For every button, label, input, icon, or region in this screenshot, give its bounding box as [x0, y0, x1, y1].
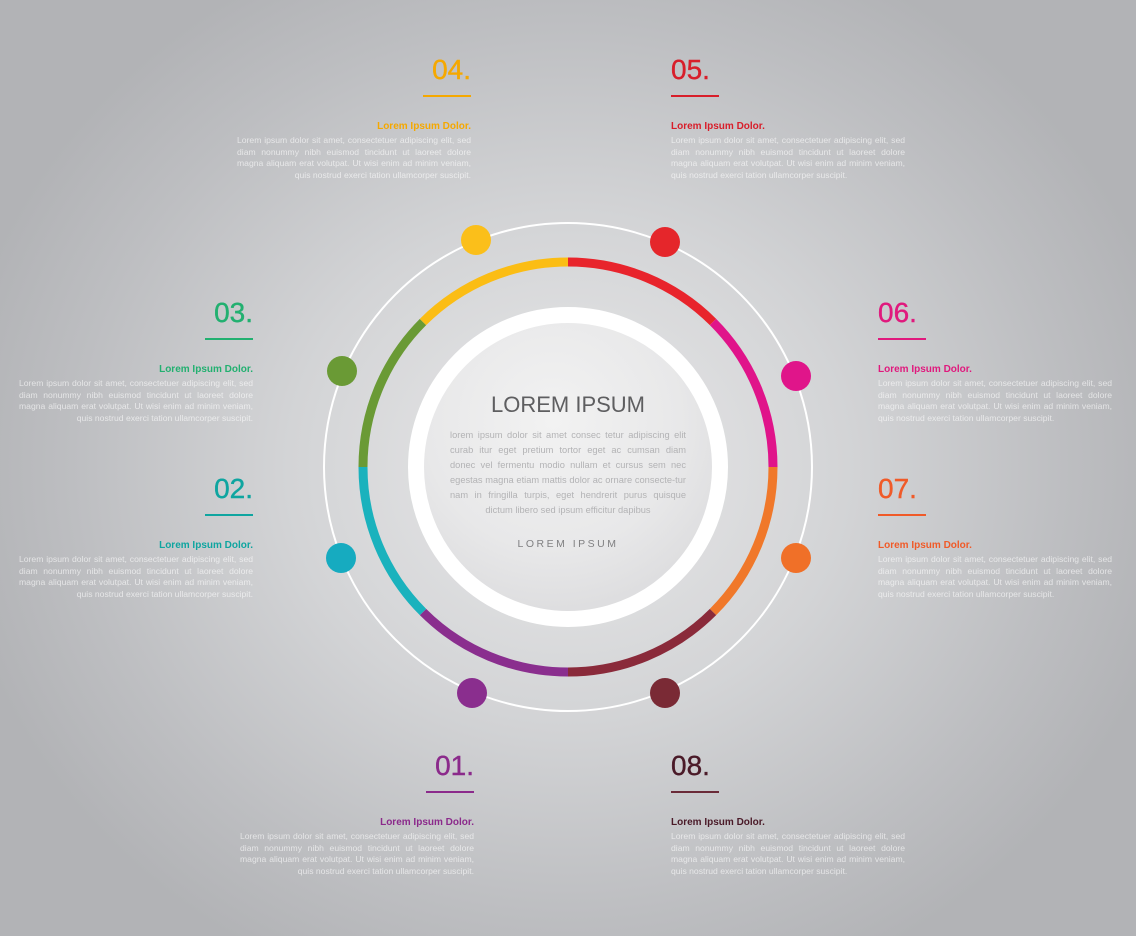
block 07: 07. — [878, 473, 917, 504]
center text: lorem ipsum dolor sit amet consec tetur adipiscing elit curab itur eget pretium tortor eget ac cumsan diam donec vel fermentu modio nullam et cursus sem nec egestas magna etiam mattis dolor ac ornare consecte-tur nam in fringilla turpis, eget hendrerit purus quisque dictum libero sed ipsum efficitur dapibus — [450, 430, 686, 515]
block 05: Lorem ipsum dolor sit amet, consectetuer adipiscing elit, sed diam nonummy nibh euismod tincidunt ut laoreet dolore magna aliquam erat volutpat. Ut wisi enim ad minim veniam, quis nostrud exerci tation ullamcorper suscipit. — [671, 135, 905, 180]
block 01: Lorem Ipsum Dolor. — [380, 817, 474, 828]
block 08 — [671, 750, 905, 876]
dots — [326, 225, 811, 708]
inner white ring and disc — [416, 315, 720, 619]
block 01: Lorem ipsum dolor sit amet, consectetuer adipiscing elit, sed diam nonummy nibh euismod tincidunt ut laoreet dolore magna aliquam erat volutpat. Ut wisi enim ad minim veniam, quis nostrud exerci tation ullamcorper suscipit. — [240, 831, 474, 876]
block 02: 02. — [214, 473, 253, 504]
block 05 — [671, 54, 905, 180]
block 06: Lorem ipsum dolor sit amet, consectetuer adipiscing elit, sed diam nonummy nibh euismod tincidunt ut laoreet dolore magna aliquam erat volutpat. Ut wisi enim ad minim veniam, quis nostrud exerci tation ullamcorper suscipit. — [878, 378, 1112, 423]
center text: LOREM IPSUM — [517, 538, 618, 550]
center text — [450, 392, 686, 550]
block 04 — [237, 54, 471, 180]
block 01: 01. — [435, 750, 474, 781]
block 01 — [240, 750, 474, 876]
block 08: Lorem ipsum dolor sit amet, consectetuer adipiscing elit, sed diam nonummy nibh euismod tincidunt ut laoreet dolore magna aliquam erat volutpat. Ut wisi enim ad minim veniam, quis nostrud exerci tation ullamcorper suscipit. — [671, 831, 905, 876]
block 03: 03. — [214, 297, 253, 328]
colored ring segments — [363, 262, 773, 672]
block 05: 05. — [671, 54, 710, 85]
block 08: Lorem Ipsum Dolor. — [671, 817, 765, 828]
block 02 — [19, 473, 253, 599]
block 08: 08. — [671, 750, 710, 781]
block 05: Lorem Ipsum Dolor. — [671, 121, 765, 132]
block 06 — [878, 297, 1112, 423]
center text: LOREM IPSUM — [491, 392, 645, 417]
block 07 — [878, 473, 1112, 599]
block 04: Lorem Ipsum Dolor. — [377, 121, 471, 132]
block 07: Lorem ipsum dolor sit amet, consectetuer adipiscing elit, sed diam nonummy nibh euismod tincidunt ut laoreet dolore magna aliquam erat volutpat. Ut wisi enim ad minim veniam, quis nostrud exerci tation ullamcorper suscipit. — [878, 554, 1112, 599]
block 04: 04. — [432, 54, 471, 85]
block 03 — [19, 297, 253, 423]
block 03: Lorem ipsum dolor sit amet, consectetuer adipiscing elit, sed diam nonummy nibh euismod tincidunt ut laoreet dolore magna aliquam erat volutpat. Ut wisi enim ad minim veniam, quis nostrud exerci tation ullamcorper suscipit. — [19, 378, 253, 423]
block 02: Lorem ipsum dolor sit amet, consectetuer adipiscing elit, sed diam nonummy nibh euismod tincidunt ut laoreet dolore magna aliquam erat volutpat. Ut wisi enim ad minim veniam, quis nostrud exerci tation ullamcorper suscipit. — [19, 554, 253, 599]
block 06: Lorem Ipsum Dolor. — [878, 364, 972, 375]
block 04: Lorem ipsum dolor sit amet, consectetuer adipiscing elit, sed diam nonummy nibh euismod tincidunt ut laoreet dolore magna aliquam erat volutpat. Ut wisi enim ad minim veniam, quis nostrud exerci tation ullamcorper suscipit. — [237, 135, 471, 180]
block 03: Lorem Ipsum Dolor. — [159, 364, 253, 375]
block 06: 06. — [878, 297, 917, 328]
block 07: Lorem Ipsum Dolor. — [878, 540, 972, 551]
block 02: Lorem Ipsum Dolor. — [159, 540, 253, 551]
outer thin ring — [324, 223, 812, 711]
